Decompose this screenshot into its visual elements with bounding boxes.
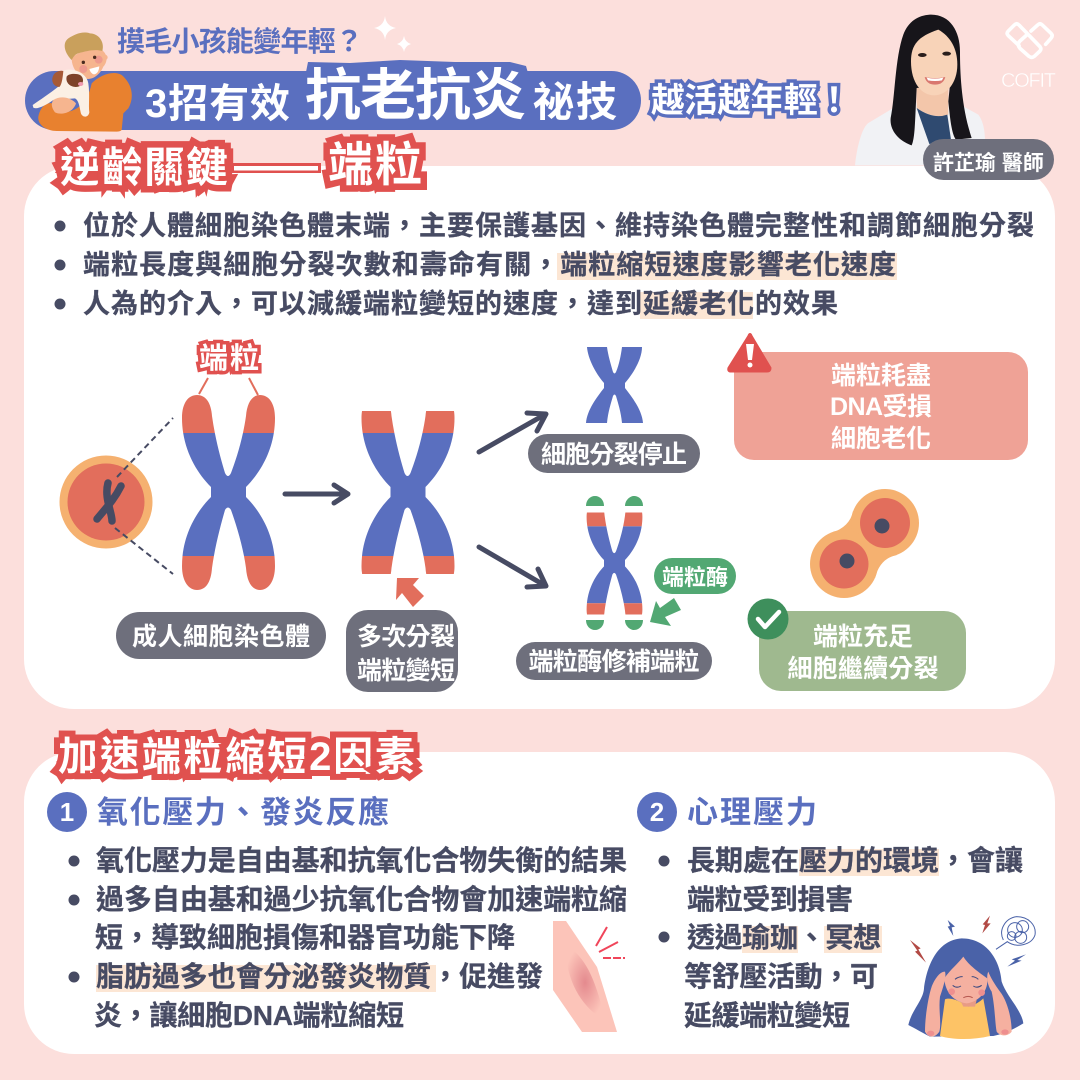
- factor 2 heading: 心理壓力: [687, 795, 817, 830]
- callout: sufficient telomeres: 細胞繼續分裂: [788, 655, 938, 683]
- label: telomerase: 端粒酶: [662, 565, 728, 590]
- name: 許芷瑜 醫師: [933, 152, 1044, 175]
- heading text 2: 端粒: [328, 138, 422, 191]
- thought bubble: [996, 917, 1035, 949]
- face: [944, 957, 987, 1003]
- elbows: [927, 1029, 1009, 1036]
- bullets: [658, 856, 670, 942]
- heading dash inner: [234, 166, 318, 170]
- logo: [1001, 24, 1056, 92]
- highlight: [96, 965, 436, 992]
- neck: [960, 1000, 977, 1007]
- bullets: [68, 856, 80, 982]
- icon: warning triangle: [729, 334, 770, 371]
- chromosome: adult: [182, 395, 275, 590]
- shirt: [917, 108, 951, 144]
- label: repeated division: 多次分裂: [357, 623, 455, 651]
- portrait: doctor: [855, 15, 985, 165]
- chromosome: stopped: [586, 347, 643, 423]
- label: adult chromosome: [116, 612, 326, 659]
- bullet line 1: 位於人體細胞染色體末端，主要保護基因、維持染色體完整性和調節細胞分裂: [83, 210, 1034, 241]
- chromosome: repaired: [586, 496, 643, 630]
- highlight 2: [640, 292, 753, 319]
- callout: telomere exhausted: [734, 352, 1028, 460]
- bullet line 2: 端粒長度與細胞分裂次數和壽命有關，端粒縮短速度影響老化速度: [83, 249, 896, 280]
- arrow: green pointer: [650, 598, 681, 626]
- panel: telomere card: [24, 166, 1055, 709]
- label: telomere tag: 端粒: [199, 342, 259, 375]
- heading text 1: 逆齡關鍵: [60, 144, 228, 191]
- label: telomere tag: [199, 342, 259, 395]
- title text: 抗老抗炎: 抗老抗炎: [305, 64, 526, 127]
- cheeks: [79, 56, 103, 73]
- mouth: [963, 996, 973, 998]
- bullets: [54, 220, 66, 310]
- title text: 3招有效: 3招有效: [145, 82, 290, 126]
- line 1: 氧化壓力是自由基和抗氧化合物失衡的結果: [96, 845, 627, 876]
- heading: 逆齡關鍵 端粒: [60, 138, 422, 191]
- title highlight backing: [306, 60, 530, 100]
- neck: [917, 86, 948, 116]
- highlights: [742, 849, 939, 953]
- telomerase caps: [586, 496, 643, 630]
- line 5: 炎，讓細胞DNA端粒縮短: [94, 999, 404, 1031]
- factor 1 heading: 氧化壓力、發炎反應: [97, 795, 389, 830]
- title text: 祕技: 祕技: [533, 79, 617, 125]
- arrow: to telomerase repair: [479, 547, 546, 587]
- name tag: [923, 139, 1054, 180]
- icon: sparkles: [374, 16, 411, 52]
- icon: dividing cells: [810, 489, 919, 598]
- label: telomerase: [654, 558, 736, 594]
- right arm: [987, 972, 1012, 1035]
- callout: sufficient telomeres: [759, 611, 966, 691]
- title banner: [25, 60, 641, 130]
- mouth: [925, 77, 945, 85]
- line 3: 透過瑜珈、冥想: [687, 922, 881, 953]
- callout: telomere exhausted: 細胞老化: [831, 425, 931, 453]
- illustration: stressed girl: [908, 916, 1035, 1039]
- label: division stops: [528, 434, 700, 473]
- line 4: 等舒壓活動，可: [684, 961, 878, 992]
- factor 2 bullet list: [658, 844, 1023, 1031]
- factor 1 bullet list: [68, 845, 627, 1031]
- label: division stops: 細胞分裂停止: [541, 441, 687, 469]
- line 4: 脂肪過多也會分泌發炎物質，促進發: [96, 961, 543, 992]
- coat: [855, 96, 985, 165]
- arrow: adult to shortened: [285, 485, 348, 503]
- factor 2 heading: 2: [650, 797, 664, 827]
- label: repeated division: [346, 610, 458, 692]
- logo mark: [1007, 24, 1052, 57]
- tag leader lines: [199, 378, 258, 395]
- bullet line 3: 人為的介入，可以減緩端粒變短的速度，達到延緩老化的效果: [83, 289, 838, 319]
- line 2: 過多自由基和過少抗氧化合物會加速端粒縮: [96, 884, 627, 915]
- eyes: [918, 52, 951, 57]
- arrow: red pointer up: [396, 578, 424, 607]
- line 2: 端粒受到損害: [687, 884, 853, 915]
- small chromosome: [97, 483, 121, 521]
- shirt: [940, 998, 990, 1039]
- line 5: 延緩端粒變短: [684, 1000, 850, 1031]
- label: telomerase repair: 端粒酶修補端粒: [528, 648, 700, 676]
- line 1: 長期處在壓力的環境，會讓: [687, 844, 1023, 876]
- dog body: [33, 70, 89, 117]
- hair: [908, 938, 1023, 1037]
- hand: [52, 97, 76, 114]
- teeth: [927, 78, 943, 81]
- label: adult chromosome: 成人細胞染色體: [132, 623, 310, 651]
- eyes: [82, 56, 96, 64]
- logo text: COFIT: [1001, 70, 1056, 92]
- factor 1 heading: 1: [60, 797, 74, 827]
- diagram: cell: [60, 456, 152, 548]
- face: [72, 50, 107, 79]
- closed eyes and brows: [953, 977, 982, 987]
- cheeks: [948, 988, 985, 996]
- highlight 1: [557, 253, 897, 280]
- left arm: [925, 972, 945, 1037]
- hair: [65, 33, 103, 60]
- dashed zoom lines: [115, 418, 173, 574]
- arrow: to division stop: [479, 413, 546, 452]
- panel: factors card: [24, 752, 1055, 1054]
- heading dash: [231, 163, 321, 173]
- dog patch: [66, 74, 83, 87]
- face: [911, 30, 957, 95]
- line 3: 短，導致細胞損傷和器官功能下降: [95, 922, 515, 953]
- factor 2 heading: [637, 792, 817, 832]
- heading: two factors: 加速端粒縮短2因素: [58, 735, 415, 779]
- hoodie: [38, 73, 132, 132]
- icon: check badge: [748, 598, 788, 640]
- stress bolts: [910, 940, 926, 963]
- hair: [891, 15, 972, 145]
- dog tongue: [78, 82, 83, 86]
- callout: telomere exhausted: DNA受損: [830, 393, 932, 421]
- callout: telomere exhausted: 端粒耗盡: [831, 362, 931, 390]
- label: telomerase repair: [516, 642, 712, 680]
- illustration: inflamed tissue: [553, 921, 625, 1032]
- subtitle: 摸毛小孩能變年輕？: [117, 26, 363, 57]
- smile: [89, 66, 99, 74]
- pain marks: [596, 927, 625, 958]
- bullet list: telomere facts: [54, 210, 1034, 319]
- callout: sufficient telomeres: 端粒充足: [813, 623, 913, 651]
- tagline: 越活越年輕！: [651, 82, 851, 120]
- ear: [102, 55, 108, 60]
- illustration: kid with dog: [33, 33, 132, 132]
- label: repeated division: 端粒變短: [357, 657, 455, 685]
- dog ear: [52, 71, 63, 87]
- chromosome: shortened: [362, 411, 454, 574]
